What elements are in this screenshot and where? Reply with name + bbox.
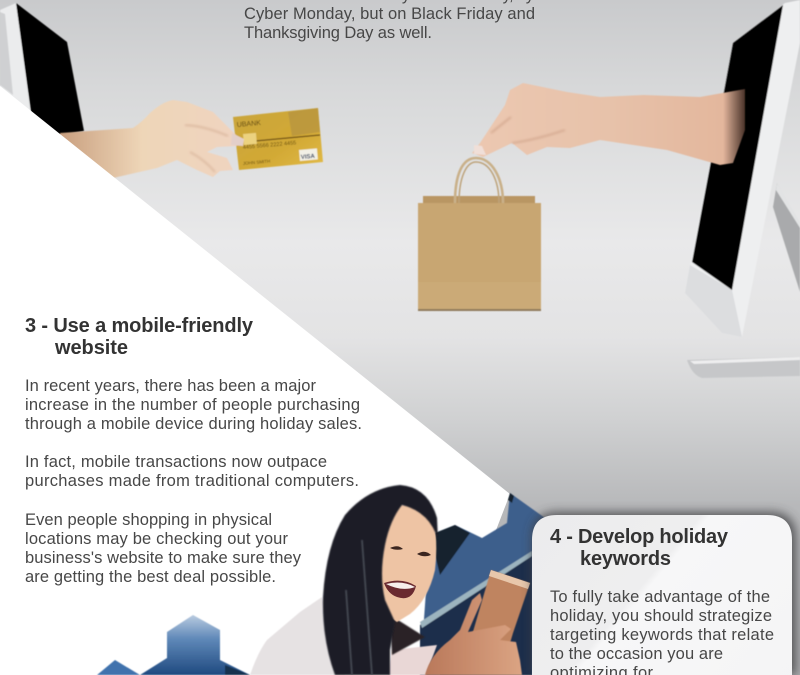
card shadow — [532, 512, 796, 675]
screen — [692, 5, 783, 290]
stand base — [687, 357, 800, 378]
icon: gold credit card: VISA — [301, 154, 316, 161]
stand — [773, 183, 800, 292]
text: tip 3 body: increase in the number of people purchasing — [25, 396, 360, 414]
icon: gold credit card: JOHN SMITH — [243, 159, 270, 166]
screen frame — [685, 0, 800, 337]
text: tip 3 body: through a mobile device during holiday sales. — [25, 415, 362, 433]
text: tip 3 body — [25, 377, 362, 586]
left hand shape — [60, 100, 243, 178]
text: tip 4 body: to the occasion you are — [550, 645, 723, 663]
hair highlight strands — [346, 540, 372, 675]
text: intro paragraph ending — [244, 0, 535, 42]
icon: left computer monitor — [0, 3, 84, 150]
icon: gold credit card: 4455 5566 2222 4455 — [243, 140, 297, 151]
card surface — [532, 515, 792, 675]
heading: tip 3 — [25, 315, 254, 359]
text: tip 3 body: are getting the best deal possible. — [25, 568, 276, 586]
icon: gold credit card: UBANK — [237, 120, 262, 129]
heading: tip 4 — [550, 526, 729, 570]
text: tip 4 body: targeting keywords that relate — [550, 626, 774, 644]
illustration: smiling woman with phone — [250, 485, 530, 675]
heading: tip 4: keywords — [580, 548, 671, 570]
shadow below chin — [390, 615, 425, 655]
illustration: right monitor — [685, 0, 800, 378]
heading: tip 3: 3 - Use a mobile-friendly — [25, 315, 254, 337]
phone — [470, 570, 530, 660]
text: intro paragraph ending: Cyber Monday, but on Black Friday and — [244, 5, 535, 23]
text: tip 3 body: Even people shopping in physical — [25, 511, 272, 529]
text: tip 4 body — [550, 588, 774, 675]
hair — [323, 485, 438, 675]
heading: tip 4: 4 - Develop holiday — [550, 526, 729, 548]
text: tip 3 body: In fact, mobile transactions now outpace — [25, 453, 327, 471]
text: tip 3 body: In recent years, there has been a major — [25, 377, 316, 395]
icon: kraft paper bag — [418, 158, 541, 311]
panel: tip 4 card — [532, 512, 796, 675]
text: tip 3 body: purchases made from traditional computers. — [25, 472, 359, 490]
illustration: low-left blue buildings — [97, 615, 250, 675]
shirt — [250, 597, 345, 675]
text: intro paragraph ending: Thanksgiving Day as well. — [244, 24, 432, 42]
mouth — [384, 581, 416, 598]
text: tip 3 body: locations may be checking out your — [25, 530, 288, 548]
face — [380, 505, 436, 622]
text: tip 4 body: To fully take advantage of the — [550, 588, 770, 606]
panel: white diagonal background — [0, 86, 510, 675]
illustration: blue buildings behind woman — [420, 493, 545, 675]
text: tip 4 body: holiday, you should strategize — [550, 607, 772, 625]
illustration: right arm holding paper bag — [418, 83, 745, 311]
text: tip 3 body: business's website to make sure they — [25, 549, 302, 567]
heading: tip 3: website — [54, 337, 128, 359]
arm shape — [472, 83, 745, 165]
icon: gold credit card — [233, 108, 323, 170]
hand — [425, 593, 522, 675]
illustration: left hand holding credit card — [60, 100, 323, 178]
eyes — [390, 546, 403, 550]
